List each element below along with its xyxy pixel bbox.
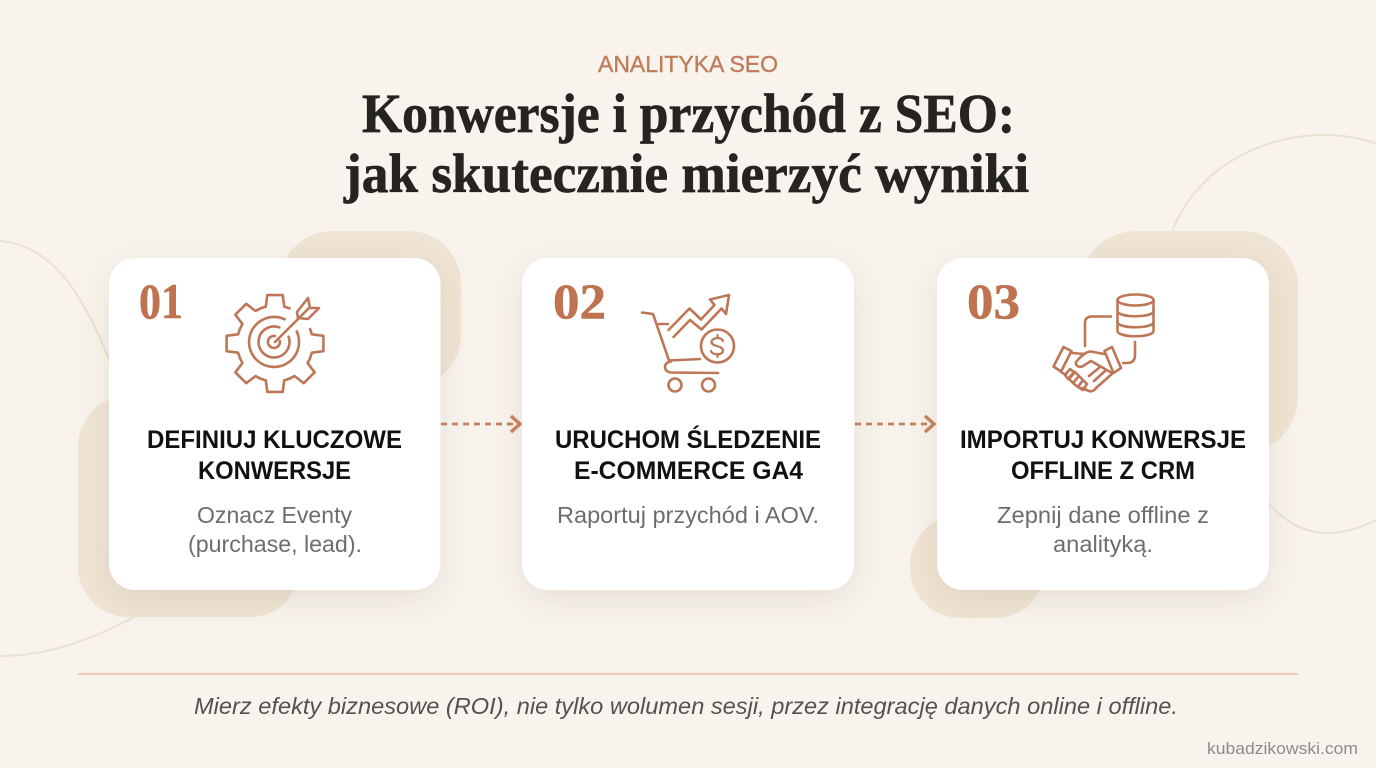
- step 3 description: [997, 502, 1209, 557]
- step 3 description: analityką.: [1053, 531, 1153, 557]
- icon: handshake connected to database: [1054, 294, 1154, 391]
- step 1 description: (purchase, lead).: [188, 531, 362, 557]
- step 3 heading: IMPORTUJ KONWERSJE: [960, 426, 1246, 454]
- arrow: step 1 to step 2: [441, 416, 520, 432]
- decorative backing shape: card 1 bottom left: [78, 396, 300, 617]
- step number 03: 03: [967, 273, 1020, 329]
- panel: step 2: [522, 258, 854, 590]
- step 1 heading: [147, 426, 402, 485]
- step 2 heading: E-COMMERCE GA4: [574, 457, 803, 485]
- step 3 description: Zepnij dane offline z: [997, 502, 1209, 528]
- step number 01: 01: [139, 273, 183, 329]
- step 2 heading: URUCHOM ŚLEDZENIE: [555, 424, 821, 454]
- decorative backing shape: card 1 top right: [280, 231, 461, 387]
- arrow: step 2 to step 3: [855, 416, 934, 432]
- decorative backing shape: card 3 top right: [1080, 231, 1298, 453]
- step 1 description: Oznacz Eventy: [197, 502, 352, 528]
- step 1 description: [188, 502, 362, 557]
- eyebrow label: ANALITYKA SEO: [598, 51, 778, 77]
- takeaway text: Mierz efekty biznesowe (ROI), nie tylko wolumen sesji, przez integrację danych online i offline.: [194, 693, 1178, 719]
- step 3 heading: [960, 426, 1246, 485]
- step 2 description: Raportuj przychód i AOV.: [557, 502, 819, 528]
- panel: step 3: [937, 258, 1269, 590]
- title: [343, 83, 1029, 204]
- icon: gear with target and arrow: [227, 295, 323, 392]
- step 3 heading: OFFLINE Z CRM: [1011, 457, 1195, 485]
- step 1 heading: DEFINIUJ KLUCZOWE: [147, 426, 402, 454]
- watermark: kubadzikowski.com: [1207, 740, 1358, 758]
- decorative backing shape: card 3 bottom left: [910, 515, 1045, 618]
- step 2 heading: [555, 424, 821, 485]
- title: jak skutecznie mierzyć wyniki: [343, 143, 1029, 204]
- step number 02: 02: [553, 273, 606, 329]
- panel: step 1: [109, 258, 440, 590]
- step 1 heading: KONWERSJE: [198, 457, 351, 485]
- icon: shopping cart with growth arrow and dollar coin: [642, 295, 734, 392]
- title: Konwersje i przychód z SEO:: [362, 83, 1015, 144]
